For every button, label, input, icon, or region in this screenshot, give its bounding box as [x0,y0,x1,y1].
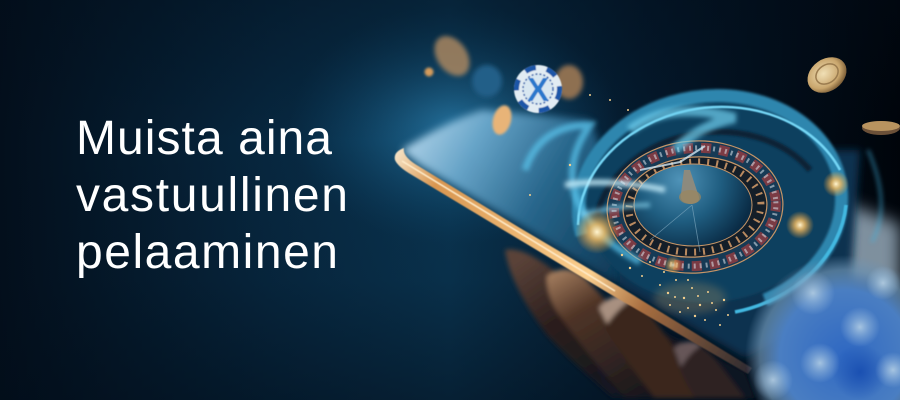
gold sparkles [529,94,849,326]
finger: thumb [599,296,705,398]
chip [514,65,562,113]
blurred coin lower [489,103,515,137]
finger: middle [547,269,668,398]
title [76,112,348,279]
title: pelaaminen [76,226,338,279]
roulette wheel [573,77,851,319]
small spark coin [424,68,434,76]
ring highlights [578,107,840,225]
floating coins and chips [424,29,900,137]
blurred foreground chip [745,255,900,400]
phone screen [402,110,650,290]
gold coin right [801,50,853,100]
finger: lower [674,343,745,398]
blue swirl [525,111,881,262]
wheel cone [634,164,752,246]
phone [395,110,860,374]
gold coin far right [862,121,900,135]
blurred sleeve [800,198,900,292]
inner shadow arc [597,132,810,215]
title: Muista aina [76,112,332,165]
chip: X [527,71,549,108]
blurred blue chip [472,65,502,97]
blurred coin behind chip [555,65,583,99]
spindle [681,170,699,204]
title: vastuullinen [76,169,348,222]
blurred coin top [427,29,477,83]
number track [603,135,787,279]
phone gold edge [395,148,752,374]
hand holding phone [505,249,755,398]
ring body [573,77,851,319]
